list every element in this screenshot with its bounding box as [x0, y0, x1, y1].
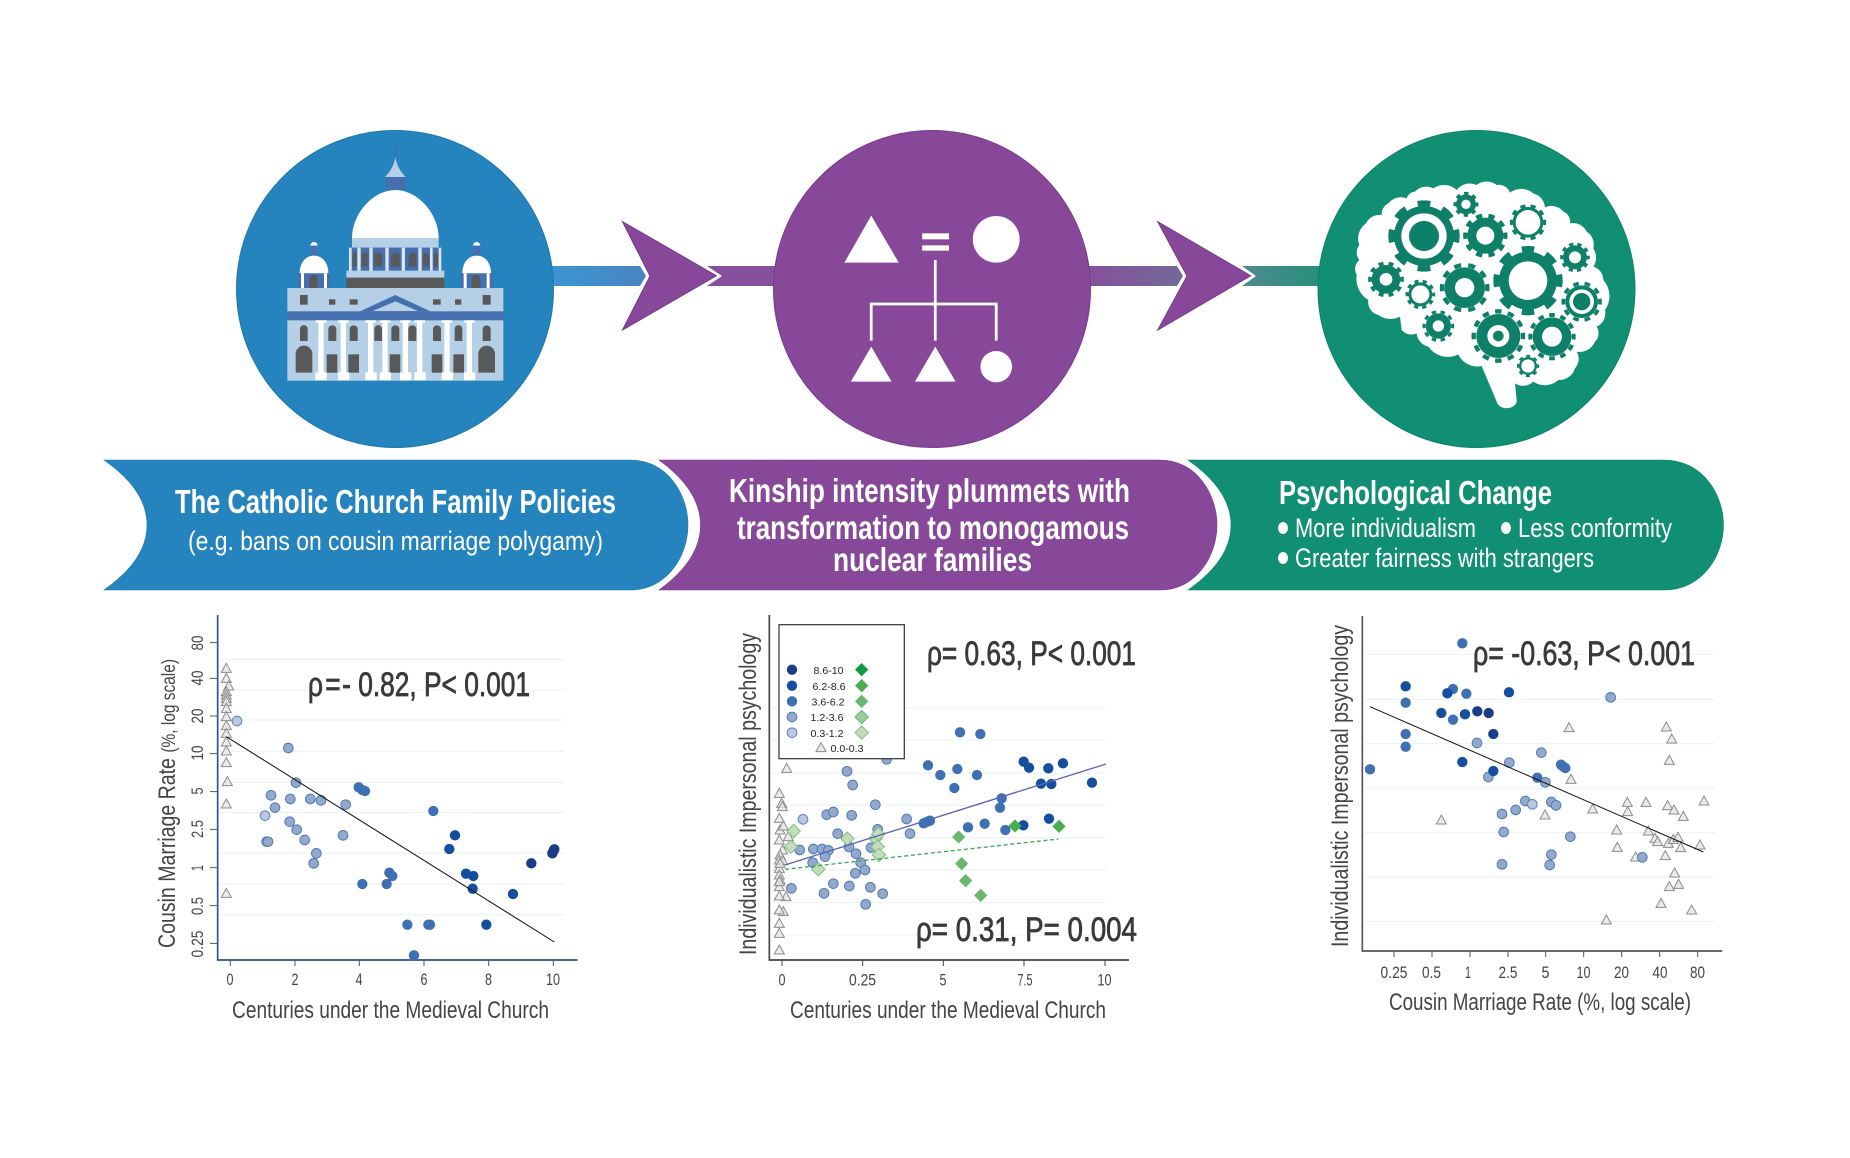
x axis labels: 0 — [226, 970, 234, 989]
y axis title: Individualistic Impersonal psychology — [735, 633, 762, 955]
x axis labels — [1380, 963, 1705, 982]
correlation annotation: circles: ρ= 0.63, P< 0.001 — [927, 635, 1136, 673]
text: bullet list: Greater fairness with strangers — [1295, 543, 1594, 573]
legend labels: 8.6-10 — [814, 665, 844, 677]
x axis labels: 0.25 — [1380, 963, 1408, 982]
x axis labels: 20 — [1614, 963, 1629, 982]
y axis labels: 0.5 — [188, 897, 207, 915]
chart: individualism vs centuries — [735, 615, 1137, 1024]
x axis labels: 4 — [356, 970, 362, 989]
x axis labels: 8 — [485, 970, 492, 989]
icon: family tree — [844, 216, 1020, 382]
y axis labels: 5 — [188, 788, 207, 794]
gear 1 — [1392, 204, 1456, 268]
x axis labels: 0.25 — [849, 970, 876, 990]
legend labels: 0.0-0.3 — [830, 743, 864, 755]
arrow: purple connector between first chevron and kinship circle — [707, 266, 780, 286]
gear 4 — [1511, 206, 1545, 239]
panel: kinship band — [659, 460, 1217, 590]
x axis labels: 6 — [420, 970, 428, 989]
legend labels: 6.2-8.6 — [812, 681, 846, 693]
legend labels — [810, 665, 864, 755]
x axis labels: 10 — [546, 970, 560, 989]
x axis labels: 0 — [778, 970, 786, 990]
y axis title: Cousin Marriage Rate (%, log scale) — [154, 659, 181, 948]
x axis labels: 0.5 — [1422, 963, 1441, 982]
text: bullet list: Less conformity — [1518, 513, 1672, 543]
text: kinship statement: transformation to monogamous — [737, 509, 1129, 546]
x axis labels: 40 — [1652, 963, 1668, 982]
x axis labels: 2 — [292, 970, 298, 989]
icon: cathedral — [287, 145, 503, 381]
text: church policies examples: (e.g. bans on cousin marriage polygamy) — [188, 526, 603, 556]
left cupola — [298, 242, 331, 288]
gear 11 — [1424, 312, 1453, 340]
legend labels: 1.2-3.6 — [810, 712, 844, 724]
correlation annotation: ρ= -0.63, P< 0.001 — [1473, 635, 1695, 673]
x axis labels: 5 — [1542, 963, 1550, 982]
x axis labels — [778, 970, 1112, 990]
y axis labels: 1 — [188, 865, 207, 871]
heading: psychological change: Psychological Change — [1279, 474, 1552, 511]
right cupola — [460, 242, 493, 288]
x axis labels: 5 — [940, 970, 946, 990]
gear 3 — [1465, 216, 1505, 256]
gear 6 — [1496, 249, 1560, 312]
text: kinship statement — [729, 472, 1130, 578]
legend labels: 3.6-6.2 — [812, 696, 845, 708]
text: kinship statement: nuclear families — [833, 541, 1032, 578]
correlation annotation: diamonds: ρ= 0.31, P= 0.004 — [916, 911, 1137, 949]
arrow: blue connector to first chevron — [550, 222, 716, 330]
y axis labels: 2.5 — [188, 820, 207, 838]
x axis title: Centuries under the Medieval Church — [232, 997, 549, 1024]
panel: psychological change band — [1188, 460, 1724, 590]
gear 12 — [1474, 311, 1523, 361]
correlation annotation: ρ=- 0.82, P< 0.001 — [308, 666, 530, 704]
y axis labels: 0.25 — [188, 930, 207, 958]
y axis labels: 20 — [188, 709, 207, 723]
x axis labels: 10 — [1098, 970, 1112, 990]
text: bullet list: More individualism — [1295, 513, 1476, 543]
gear 13 — [1530, 315, 1574, 358]
gear 5 — [1562, 244, 1588, 271]
panel: church circle — [236, 130, 554, 448]
y axis labels: 80 — [188, 636, 207, 650]
gear 2 — [1455, 193, 1477, 215]
gear 7 — [1370, 263, 1402, 295]
arrow: purple connector to second chevron — [1085, 222, 1325, 330]
panel: church policies band — [104, 460, 688, 590]
legend labels: 0.3-1.2 — [810, 728, 844, 740]
panel: kinship circle — [774, 130, 1090, 448]
x axis labels: 7.5 — [1018, 970, 1032, 990]
y axis title: Individualistic Impersonal psychology — [1327, 625, 1354, 947]
icon: brain with gears — [1355, 181, 1609, 408]
text: bullet list — [1278, 513, 1672, 573]
x axis title: Cousin Marriage Rate (%, log scale) — [1389, 989, 1691, 1016]
y axis labels: 10 — [188, 746, 207, 760]
y axis labels — [188, 636, 207, 958]
x axis title: Centuries under the Medieval Church — [790, 997, 1106, 1024]
heading: church policies: The Catholic Church Family Policies — [175, 483, 616, 520]
text: kinship statement: Kinship intensity plummets with — [729, 472, 1130, 509]
y axis labels: 40 — [188, 671, 207, 685]
chart: cousin marriage vs centuries — [154, 615, 578, 1024]
x axis labels: 10 — [1576, 963, 1590, 982]
x axis labels — [226, 970, 560, 989]
legend box — [779, 625, 904, 759]
panel: psychology circle — [1318, 130, 1635, 448]
gear 10 — [1563, 283, 1600, 320]
gear 8 — [1407, 281, 1434, 308]
x axis labels: 2.5 — [1498, 963, 1518, 982]
chart: individualism vs cousin marriage — [1327, 616, 1722, 1016]
x axis labels: 80 — [1690, 963, 1705, 982]
x axis labels: 1 — [1465, 963, 1471, 982]
gear 14 — [1518, 356, 1538, 376]
gear 9 — [1442, 265, 1487, 310]
